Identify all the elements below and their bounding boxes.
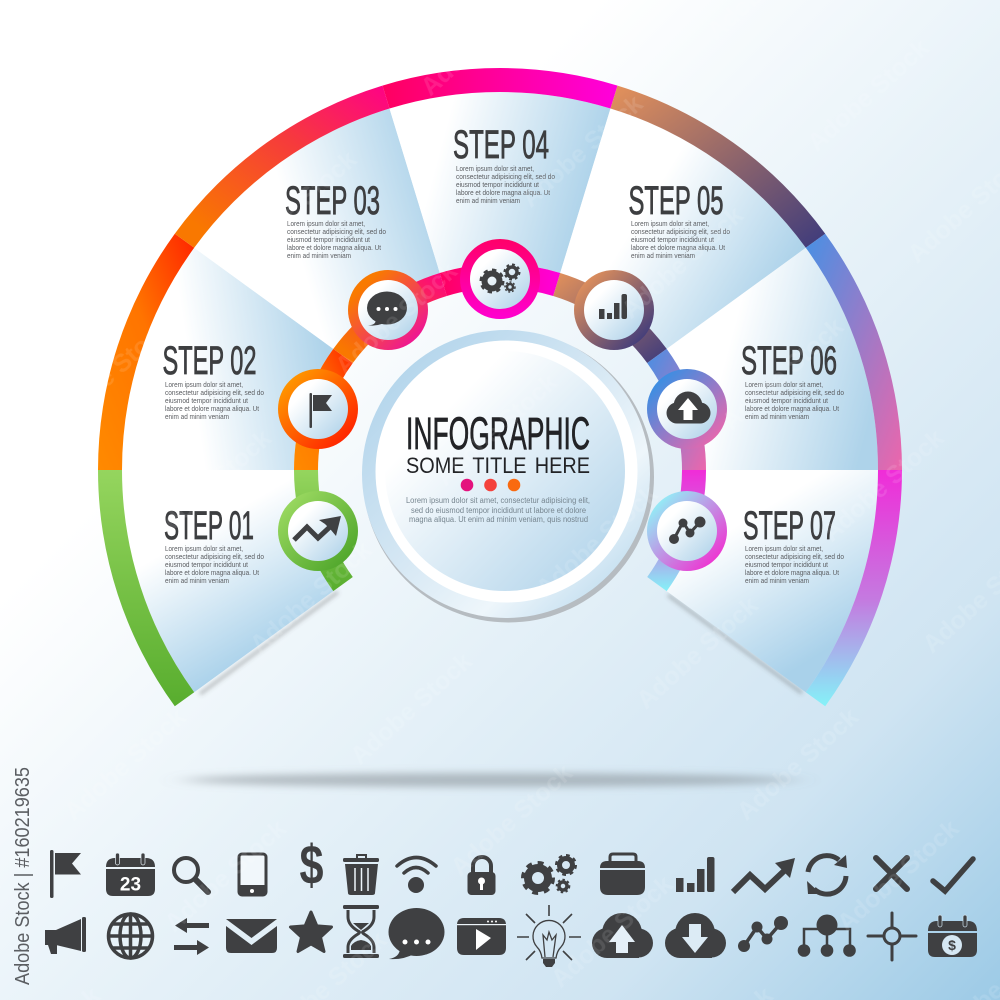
- step 05 text: [631, 219, 730, 260]
- title: INFOGRAPHIC: [406, 408, 590, 459]
- step 04 text: Lorem ipsum dolor sit amet,: [456, 164, 534, 173]
- step 01 text: consectetur adipisicing elit, sed do: [165, 552, 264, 561]
- icon: refresh: [807, 855, 847, 894]
- icon: calendar 23: 23: [120, 874, 141, 896]
- icon: envelope: [226, 919, 277, 953]
- step 01 heading: STEP 01: [164, 504, 254, 548]
- step 02 text: enim ad minim veniam: [165, 412, 229, 421]
- icon: hierarchy: [798, 914, 856, 957]
- icon: speech bubble: [388, 908, 444, 959]
- icon: gears: [523, 856, 576, 893]
- panel: centre circle: [362, 330, 654, 622]
- icon: calendar dollar: [928, 915, 977, 957]
- icon: phone: [238, 854, 267, 896]
- icon: crosshair: [868, 913, 916, 960]
- step 05 text: eiusmod tempor incididunt ut: [631, 235, 714, 244]
- panel: step 06 wedge: [667, 248, 878, 470]
- subtitle: SOME TITLE HERE: [406, 453, 590, 478]
- icon: line dots: [738, 916, 788, 952]
- outer coloured arc: [98, 68, 902, 706]
- icon: swap arrows: [174, 918, 209, 955]
- step 03 text: Lorem ipsum dolor sit amet,: [287, 219, 365, 228]
- step 07 text: enim ad minim veniam: [745, 576, 809, 585]
- step 06 text: consectetur adipisicing elit, sed do: [745, 388, 844, 397]
- panel: step 05 wedge: [560, 108, 806, 349]
- step 05 text: enim ad minim veniam: [631, 251, 695, 260]
- step 04 text: eiusmod tempor incididunt ut: [456, 180, 539, 189]
- step 04 text: enim ad minim veniam: [456, 196, 520, 205]
- panel: step 01 wedge: [122, 470, 333, 692]
- centre paragraph: magna aliqua. Ut enim ad minim veniam, quis nostrud: [409, 515, 588, 524]
- step 03 text: enim ad minim veniam: [287, 251, 351, 260]
- panel: step 07 wedge: [667, 470, 878, 692]
- icon: trash can: [343, 855, 379, 895]
- inner coloured arc: [294, 264, 706, 591]
- icon: magnifier: [174, 858, 208, 892]
- step 01 text: labore et dolore magna aliqua. Ut: [165, 568, 259, 577]
- wedge edge shadows: [200, 592, 802, 694]
- step 03 text: eiusmod tempor incididunt ut: [287, 235, 370, 244]
- step 07 text: Lorem ipsum dolor sit amet,: [745, 544, 823, 553]
- icon: light bulb: [517, 905, 581, 967]
- step 03 text: [287, 219, 386, 260]
- panel: step 04 wedge: [390, 92, 610, 273]
- node: step 07 line dots icon: [647, 491, 727, 571]
- icon: cross: [876, 858, 907, 889]
- step 03 text: labore et dolore magna aliqua. Ut: [287, 243, 381, 252]
- centre paragraph: Lorem ipsum dolor sit amet, consectetur adipisicing elit,: [406, 496, 590, 505]
- panel: step 02 wedge: [122, 248, 333, 470]
- step 05 text: labore et dolore magna aliqua. Ut: [631, 243, 725, 252]
- icon: trend arrow: [733, 858, 795, 892]
- step 05 text: consectetur adipisicing elit, sed do: [631, 227, 730, 236]
- step 02 text: consectetur adipisicing elit, sed do: [165, 388, 264, 397]
- step 04 text: labore et dolore magna aliqua. Ut: [456, 188, 550, 197]
- step 02 heading: STEP 02: [162, 339, 256, 383]
- step 01 text: [165, 544, 264, 585]
- step 07 text: [745, 544, 844, 585]
- icon: hourglass: [343, 905, 379, 958]
- centre paragraph: [406, 496, 590, 524]
- icon: wifi: [397, 858, 436, 893]
- step 02 text: [165, 380, 264, 421]
- icon: dollar: $: [300, 833, 324, 896]
- icon: star: [290, 912, 332, 952]
- icon: bar chart: [676, 857, 714, 892]
- step 05 text: Lorem ipsum dolor sit amet,: [631, 219, 709, 228]
- stock id vertical text: Adobe Stock | #160219635: [12, 767, 34, 985]
- step 03 text: consectetur adipisicing elit, sed do: [287, 227, 386, 236]
- step 07 text: eiusmod tempor incididunt ut: [745, 560, 828, 569]
- step 06 text: labore et dolore magna aliqua. Ut: [745, 404, 839, 413]
- step 06 text: [745, 380, 844, 421]
- step 06 text: eiusmod tempor incididunt ut: [745, 396, 828, 405]
- icon: video window: [457, 918, 506, 955]
- step 06 heading: STEP 06: [741, 339, 837, 383]
- step 07 text: labore et dolore magna aliqua. Ut: [745, 568, 839, 577]
- step 04 heading: STEP 04: [453, 123, 549, 167]
- step 04 text: [456, 164, 555, 205]
- icon: briefcase: [600, 854, 645, 895]
- icon: cloud download: [665, 913, 726, 958]
- icon: cloud upload: [592, 913, 653, 958]
- step 06 text: Lorem ipsum dolor sit amet,: [745, 380, 823, 389]
- node: step 06 cloud upload icon: [647, 369, 727, 449]
- step 04 text: consectetur adipisicing elit, sed do: [456, 172, 555, 181]
- icon: check: [933, 859, 973, 891]
- icon: globe: [108, 914, 153, 958]
- ground shadow: [185, 773, 795, 787]
- three dots: [461, 479, 520, 491]
- node: step 01 trend icon: [278, 491, 358, 571]
- centre paragraph: sed do eiusmod tempor incididunt ut labore et dolore: [411, 506, 587, 515]
- step 07 heading: STEP 07: [743, 504, 836, 548]
- icon: padlock: [468, 857, 496, 895]
- step 05 heading: STEP 05: [628, 179, 724, 223]
- step 07 text: consectetur adipisicing elit, sed do: [745, 552, 844, 561]
- icon: flag: [50, 850, 81, 898]
- icon: megaphone: [45, 917, 86, 954]
- node: step 04 gears icon: [460, 239, 540, 319]
- icon: calendar 23: [106, 853, 155, 896]
- step 01 text: enim ad minim veniam: [165, 576, 229, 585]
- step 01 text: Lorem ipsum dolor sit amet,: [165, 544, 243, 553]
- step 02 text: eiusmod tempor incididunt ut: [165, 396, 248, 405]
- node: step 05 bars icon: [574, 270, 654, 350]
- step 02 text: Lorem ipsum dolor sit amet,: [165, 380, 243, 389]
- node: step 03 chat icon: [348, 270, 428, 350]
- step 03 heading: STEP 03: [285, 179, 380, 223]
- icon: calendar dollar: $: [948, 937, 956, 953]
- node: step 02 flag icon: [278, 369, 358, 449]
- step 01 text: eiusmod tempor incididunt ut: [165, 560, 248, 569]
- panel: step 03 wedge: [194, 108, 440, 349]
- step 02 text: labore et dolore magna aliqua. Ut: [165, 404, 259, 413]
- step 06 text: enim ad minim veniam: [745, 412, 809, 421]
